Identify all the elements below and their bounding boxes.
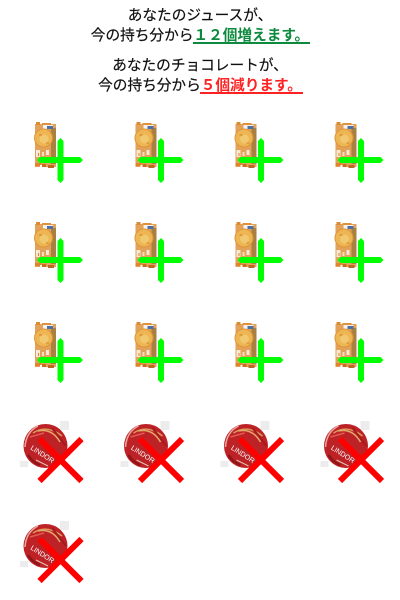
juice row 2 xyxy=(34,222,384,283)
heading: juice message: あなたのジュースが、 xyxy=(128,8,272,24)
underline: chocolate xyxy=(200,92,303,94)
heading: juice message: 今の持ち分から１２個増えます。 xyxy=(91,28,309,44)
heading: chocolate message: 今の持ち分から５個減ります。 xyxy=(98,78,302,94)
underline: juice xyxy=(193,42,310,44)
chocolate row 2 xyxy=(20,521,82,581)
chocolate row 1 xyxy=(20,421,382,481)
heading: chocolate message: あなたのチョコレートが、 xyxy=(112,58,288,74)
heading: chocolate message xyxy=(98,57,302,94)
heading: juice message xyxy=(91,7,309,44)
juice row 1 xyxy=(34,122,384,183)
juice row 3 xyxy=(34,322,384,383)
